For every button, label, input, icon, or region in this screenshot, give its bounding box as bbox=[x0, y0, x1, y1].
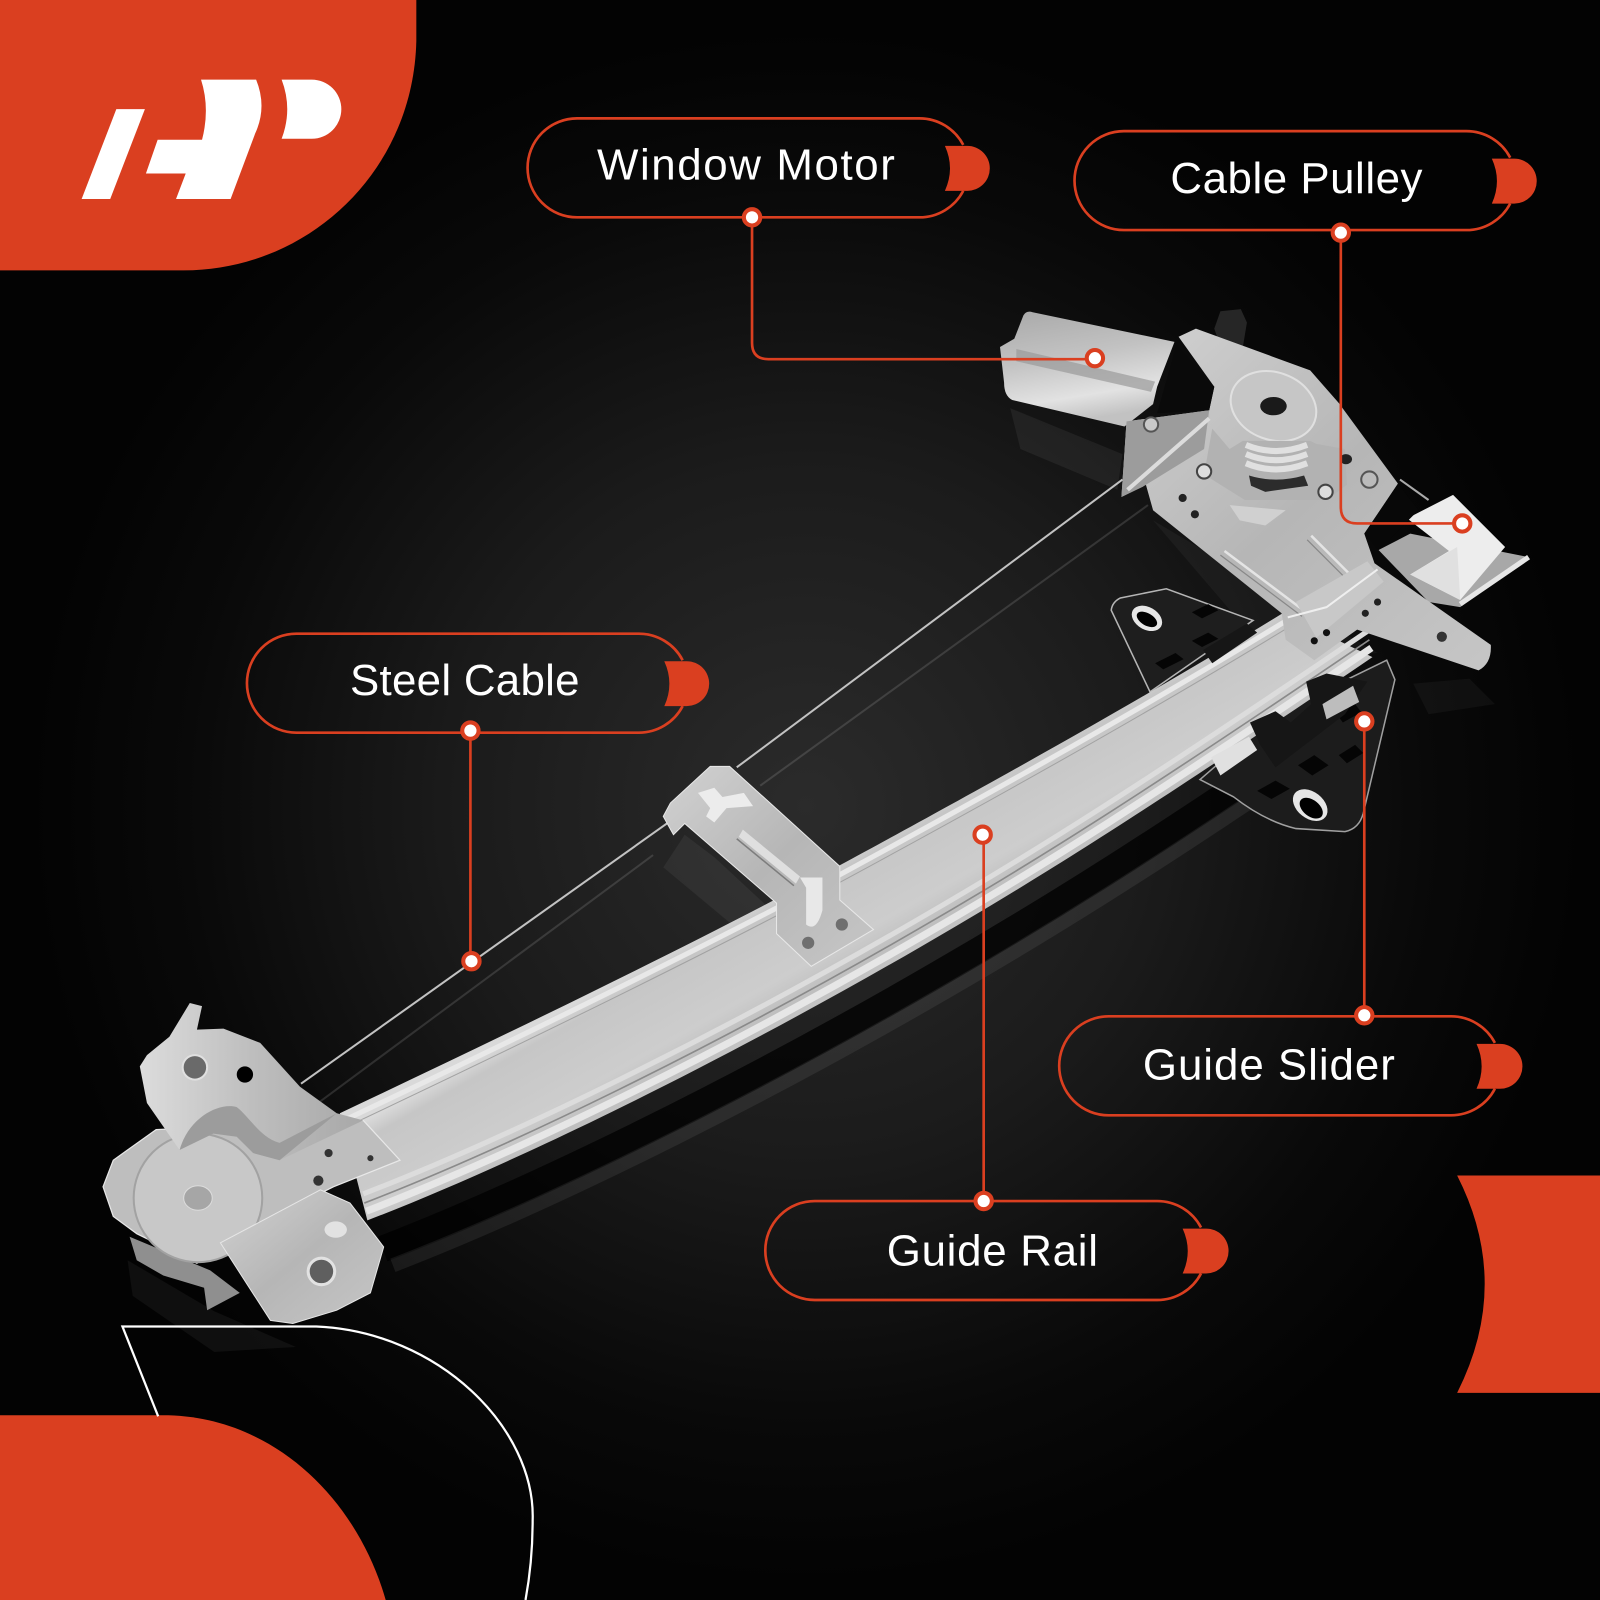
top dot bbox=[1333, 224, 1349, 241]
top dot bbox=[744, 209, 760, 226]
upper bracket bbox=[140, 1003, 363, 1160]
callout: steel cable bbox=[247, 634, 709, 969]
leader line bbox=[1341, 233, 1462, 523]
leader line bbox=[469, 731, 472, 961]
leader line bbox=[982, 835, 985, 1201]
left end bracket bbox=[103, 1003, 400, 1323]
end dot bbox=[974, 827, 991, 843]
decorative shape: bottom-left red dome bbox=[0, 1415, 386, 1600]
tab bbox=[945, 146, 990, 191]
tab bbox=[1492, 159, 1537, 204]
pill outline bbox=[765, 1201, 1201, 1300]
pill outline bbox=[1059, 1016, 1495, 1115]
bottom dot bbox=[976, 1193, 992, 1209]
plate silhouette bbox=[1121, 329, 1491, 670]
pulley boss bbox=[1221, 359, 1326, 453]
callout: guide rail bbox=[765, 827, 1229, 1300]
black slider clips on rail bbox=[1203, 623, 1367, 776]
label: Guide Rail bbox=[887, 1226, 1098, 1275]
rivet bbox=[184, 1186, 212, 1210]
decorative shape: top-left red corner bbox=[0, 0, 416, 270]
callout: window motor bbox=[528, 118, 1103, 366]
leader line bbox=[752, 217, 1095, 359]
decorative outline: bottom-left white curve bbox=[122, 1327, 533, 1600]
logo bbox=[82, 80, 341, 199]
pill outline bbox=[247, 634, 683, 733]
rail end slider and rail extension bbox=[1379, 480, 1529, 607]
callout: guide slider bbox=[1059, 713, 1522, 1115]
label: Steel Cable bbox=[350, 656, 580, 705]
end dot bbox=[1356, 713, 1372, 730]
spool bbox=[1246, 445, 1307, 469]
spool shadow bbox=[1249, 476, 1308, 492]
end dot bbox=[463, 953, 480, 969]
decorative shape: right red block bbox=[1457, 1176, 1600, 1393]
plate embossing bbox=[1224, 536, 1352, 612]
mounting plate: lower black bbox=[1200, 660, 1395, 832]
steel cable line bbox=[301, 480, 1122, 1084]
lower bracket bbox=[220, 1190, 384, 1323]
end dot bbox=[1087, 350, 1103, 366]
housing sides bbox=[1204, 429, 1347, 500]
regulator plate assembly bbox=[1121, 329, 1491, 670]
base plate bbox=[103, 1120, 400, 1263]
tab bbox=[1477, 1044, 1522, 1089]
pill outline bbox=[1075, 131, 1510, 230]
label: Window Motor bbox=[597, 141, 895, 190]
left flap bbox=[1121, 410, 1209, 497]
window motor body bbox=[1000, 312, 1174, 427]
bottom dot bbox=[1356, 1007, 1372, 1023]
end dot bbox=[1454, 515, 1470, 532]
top dot bbox=[462, 722, 479, 739]
tab bbox=[664, 661, 709, 706]
dark cavity bbox=[1157, 345, 1214, 413]
label: Guide Slider bbox=[1143, 1041, 1395, 1090]
leader line bbox=[1363, 721, 1366, 1015]
product: window regulator bbox=[103, 309, 1529, 1352]
lower tail bbox=[130, 1237, 240, 1310]
guide rail bbox=[340, 613, 1372, 1220]
mounting plate: upper black bbox=[1111, 589, 1253, 692]
pill outline bbox=[528, 118, 963, 217]
callout: cable pulley bbox=[1075, 131, 1537, 532]
screws bbox=[1197, 464, 1211, 479]
label: Cable Pulley bbox=[1170, 154, 1423, 203]
reflections under product bbox=[128, 408, 1495, 1352]
motor knob bbox=[1214, 309, 1247, 347]
pulley disc bbox=[134, 1134, 262, 1262]
tab bbox=[1183, 1229, 1229, 1273]
center clip bracket bbox=[663, 766, 873, 966]
black gap bbox=[1364, 484, 1418, 550]
